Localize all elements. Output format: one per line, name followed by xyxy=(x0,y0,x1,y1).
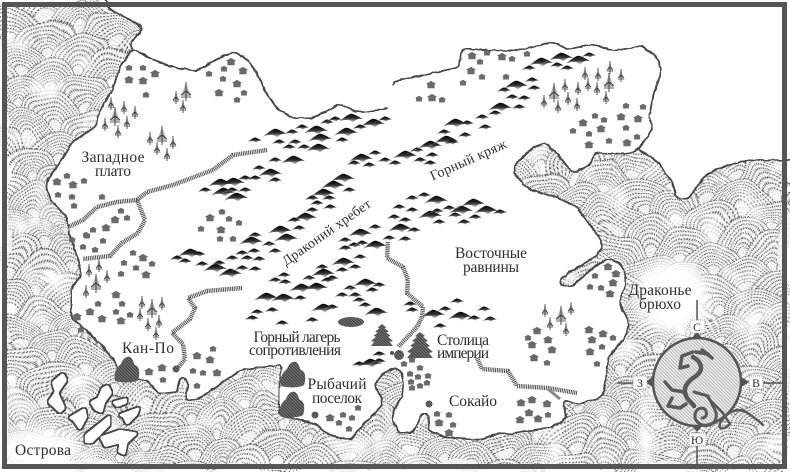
label: Восточные равнины: Восточные xyxy=(455,245,527,262)
dark hills at Kan-Po and the fishing village xyxy=(114,357,305,417)
label: Драконье брюхо: брюхо xyxy=(639,296,681,313)
label: Столица империи xyxy=(437,332,489,362)
mountains: north-eastern ridge xyxy=(387,52,596,167)
label: Горный лагерь сопротивления: Горный лагерь xyxy=(254,329,340,346)
compass letters: З xyxy=(637,376,643,390)
hatched marsh xyxy=(338,317,364,327)
label: Рыбачий поселок: поселок xyxy=(312,390,362,407)
compass letters xyxy=(633,320,763,447)
label: Кан-По: Кан-По xyxy=(122,340,174,357)
label: Сокайо: Сокайо xyxy=(449,393,497,410)
label: Западное плато xyxy=(82,149,145,180)
label: Западное плато: плато xyxy=(95,163,131,180)
mountains: western ridges xyxy=(166,114,402,279)
label: Горный лагерь сопротивления xyxy=(249,329,341,359)
settlements: western and southern houses xyxy=(52,58,362,432)
label: Восточные равнины xyxy=(455,245,527,276)
compass letters: Ю xyxy=(691,433,703,447)
mountains: central ridge xyxy=(241,192,507,369)
label: Драконье брюхо: Драконье xyxy=(628,282,692,299)
gap in the northern coast xyxy=(389,86,395,108)
compass letters: В xyxy=(752,376,760,390)
settlements: eastern houses xyxy=(400,50,647,436)
label: Драконий хребет: Драконий хребет xyxy=(280,197,374,269)
white northern area and headland xyxy=(100,0,790,198)
compass letters: С xyxy=(693,320,701,334)
label: Горный лагерь сопротивления: сопротивления xyxy=(249,342,341,359)
label: Столица империи: Столица xyxy=(437,332,489,349)
label: Столица империи: империи xyxy=(437,345,489,362)
label: Западное плато: Западное xyxy=(82,149,145,166)
label: Восточные равнины: равнины xyxy=(463,259,520,276)
label: Рыбачий поселок xyxy=(308,376,366,407)
mountains near the capital xyxy=(399,298,497,330)
icon: dragon xyxy=(665,350,763,428)
faded white sea patches xyxy=(0,260,710,472)
label: Горный кряж: Горный кряж xyxy=(428,137,509,184)
label: Острова: Острова xyxy=(15,442,71,459)
rivers xyxy=(68,150,577,399)
islands xyxy=(48,373,140,455)
label: Драконье брюхо xyxy=(628,282,692,313)
forests xyxy=(82,61,624,340)
compass rose xyxy=(617,300,782,464)
capital pagodas and town markers xyxy=(172,324,433,418)
label: Рыбачий поселок: Рыбачий xyxy=(308,376,366,393)
land mass with coastline xyxy=(47,43,660,439)
